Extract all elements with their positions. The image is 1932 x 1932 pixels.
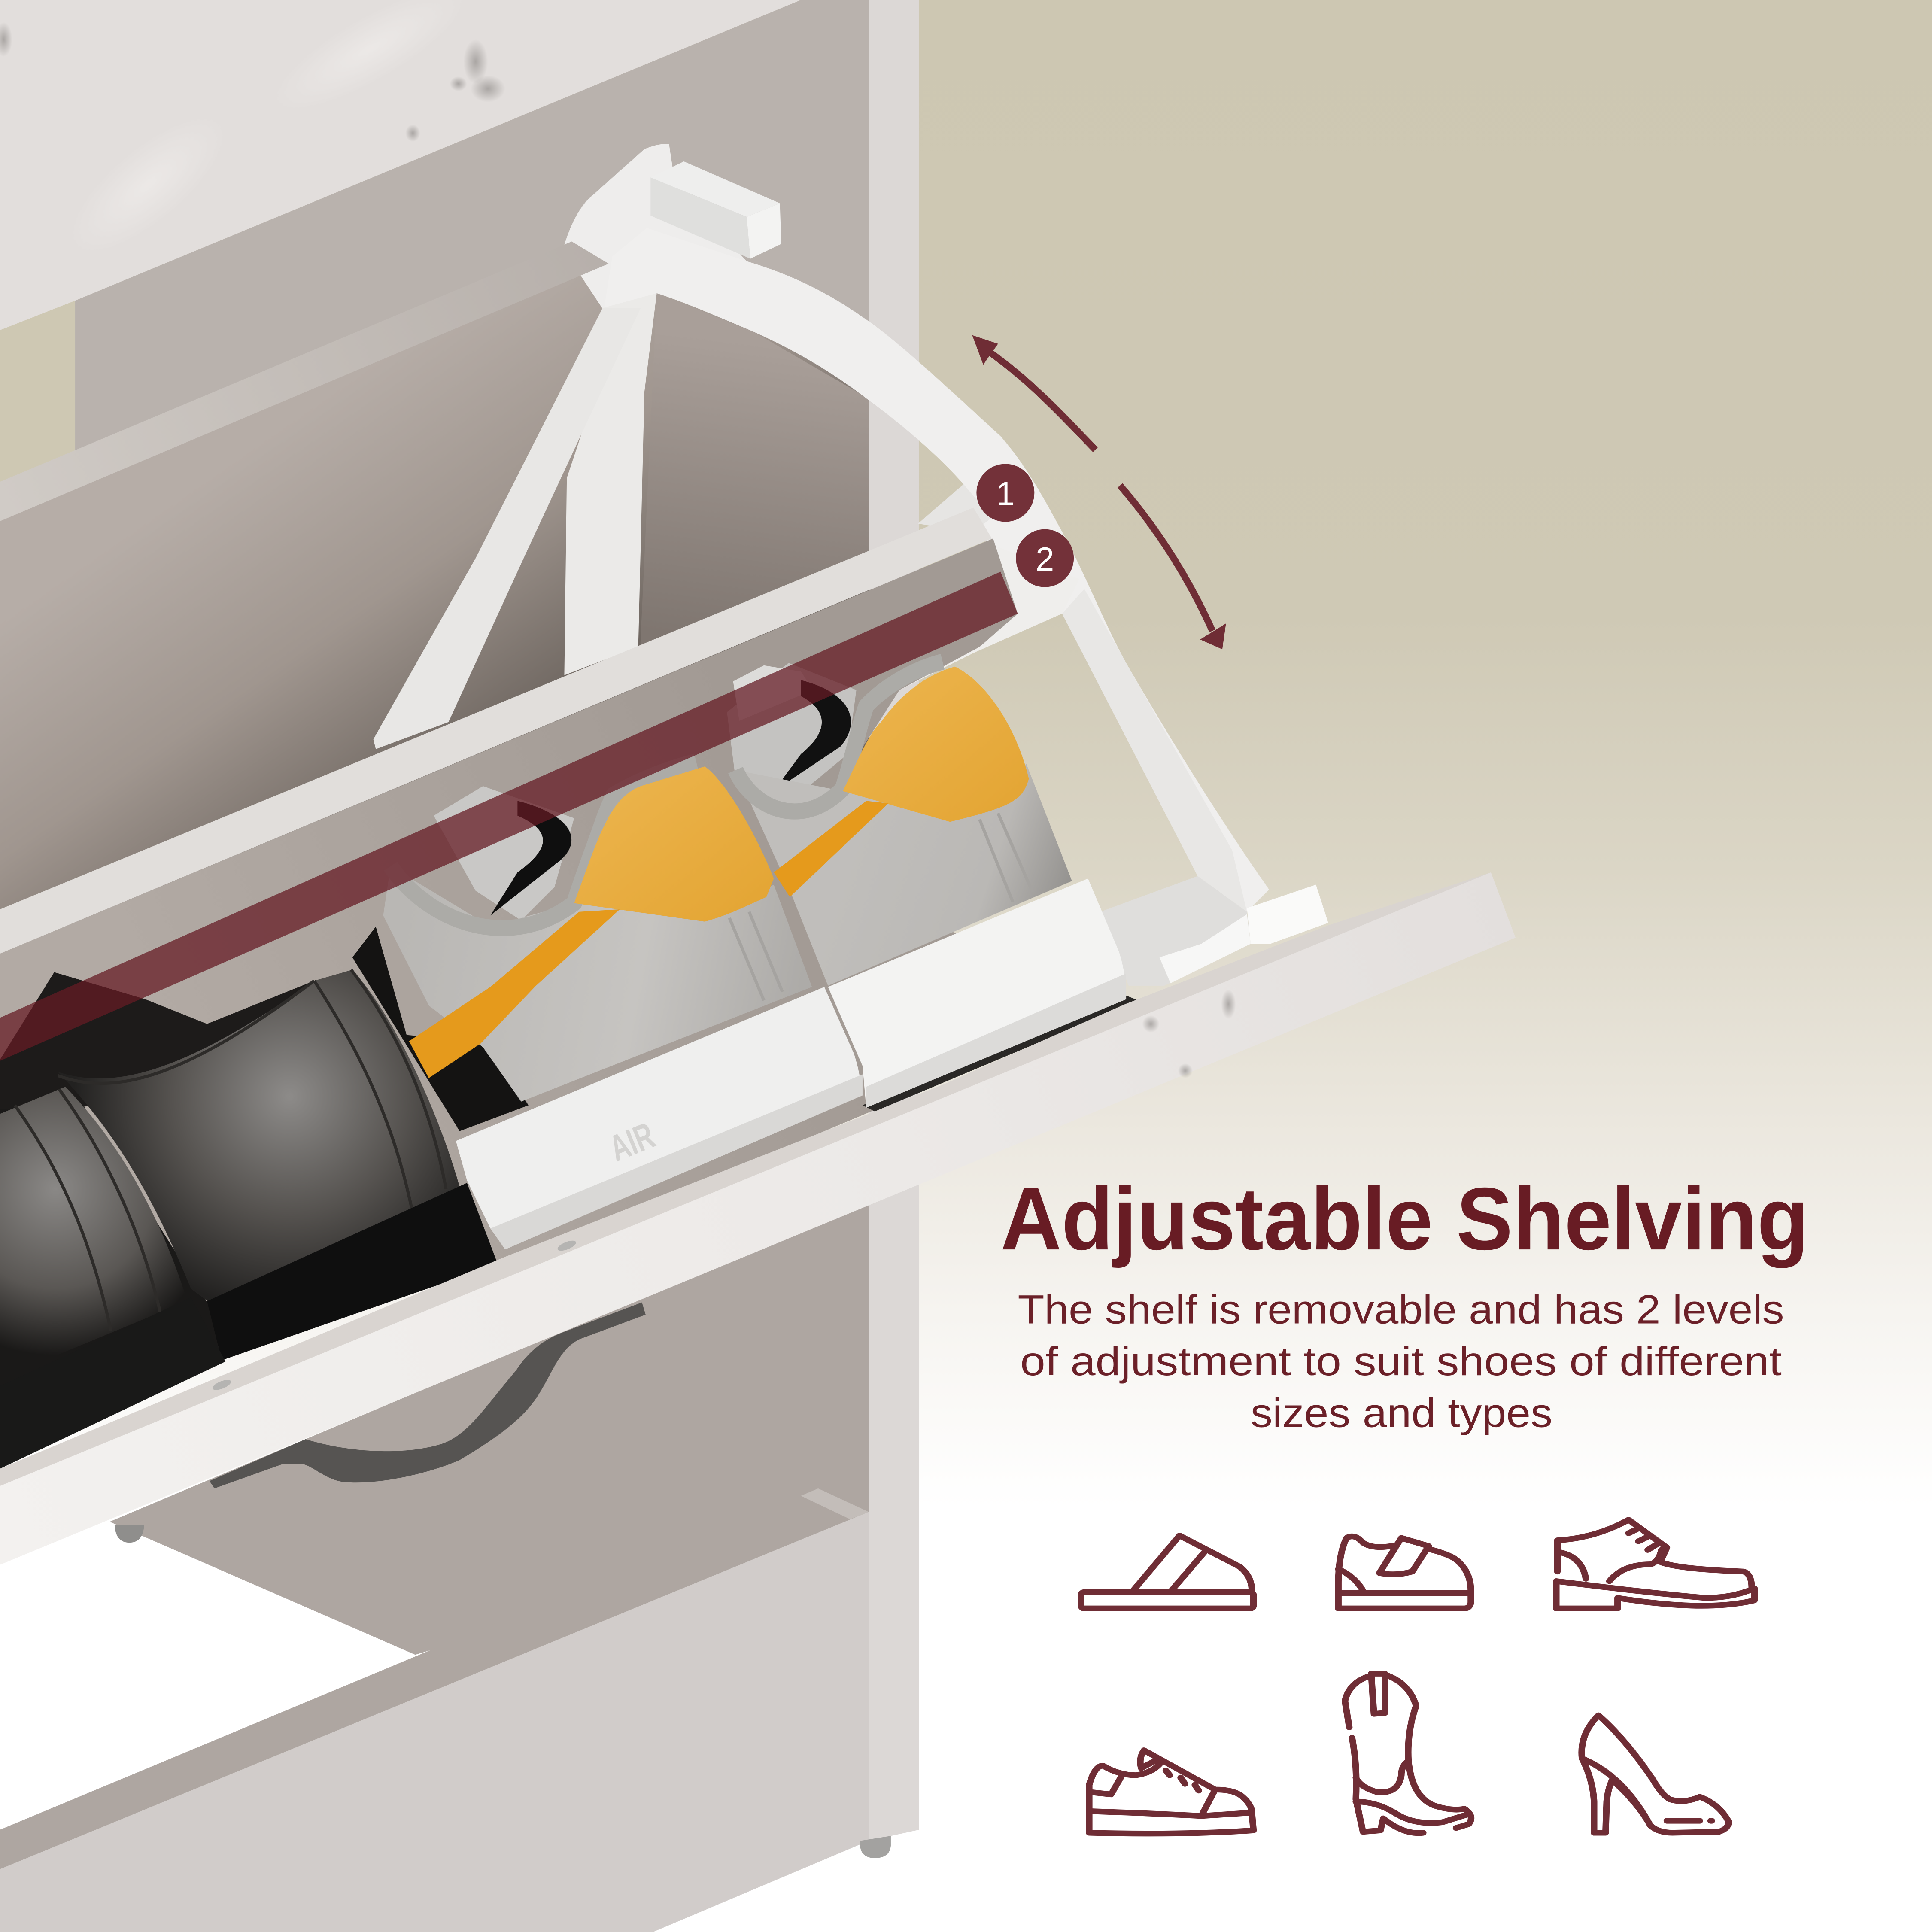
arrow up (972, 335, 1095, 450)
side panel lower (869, 1170, 919, 1841)
inner cavity behind bracket (0, 264, 870, 986)
lower back panel (109, 1201, 870, 1655)
rear sneaker body (735, 764, 1072, 986)
flap screw 1 (556, 1239, 577, 1253)
marble veins (1142, 990, 1236, 1078)
level 2 badge (1016, 529, 1074, 587)
back panel upper (75, 0, 870, 517)
foot clip (1247, 885, 1328, 944)
front leather shoe body (0, 1087, 187, 1379)
front sneaker collar (391, 762, 696, 928)
description: of adjustment to suit shoes of different (1020, 1339, 1782, 1384)
front sneaker interior (434, 786, 574, 920)
rear leather shoe body (58, 970, 459, 1306)
description: sizes and types (1251, 1390, 1552, 1436)
front sneaker (352, 762, 863, 1249)
front sneaker black lining (490, 801, 571, 915)
shoe type icons (1081, 1520, 1755, 1834)
rear sneaker (727, 662, 1126, 1108)
rear sneaker stitching (980, 813, 1033, 902)
front leather shoe stitching (15, 1089, 160, 1331)
upper arm (918, 484, 992, 532)
lower arc inner shade (1062, 589, 1247, 912)
level arrows (972, 335, 1226, 649)
lower arm (899, 542, 1079, 690)
rear leather shoe (0, 970, 498, 1360)
furniture foot right (860, 1836, 891, 1858)
icon: oxford shoe (1556, 1520, 1755, 1608)
bracket (374, 144, 1328, 986)
flap screw 2 (211, 1378, 232, 1392)
front sneaker black panel (352, 927, 529, 1131)
drawer top edge (0, 1488, 869, 1869)
icon: sneaker (1089, 1750, 1254, 1834)
icon: slipper (1081, 1536, 1254, 1608)
upper and lower arc (604, 228, 1269, 912)
rear sneaker tread (866, 973, 1126, 1108)
bracket apex (563, 144, 747, 310)
rear leather shoe stitching (58, 970, 446, 1214)
title: Adjustable Shelving (1000, 1169, 1809, 1268)
drawer front (0, 1512, 869, 1932)
level 1 badge: 1 (996, 476, 1015, 513)
marble top panel (0, 0, 801, 330)
rear sneaker black lining (774, 680, 851, 791)
front sneaker stitching (729, 912, 782, 1000)
arrow down (1120, 486, 1226, 649)
sole shadow (863, 996, 1139, 1112)
rear leather shoe top dark (0, 972, 314, 1109)
mounting block (650, 161, 781, 259)
icon: velcro shoe (1338, 1537, 1471, 1608)
rear leather shoe sole (207, 1183, 498, 1360)
front sneaker body (383, 866, 812, 1102)
level 2 badge: 2 (1036, 541, 1054, 578)
front sneaker swoosh (409, 909, 620, 1078)
gap showing background (0, 301, 75, 483)
drawer edge highlight (801, 1488, 869, 1519)
shoes shadow fill (0, 1091, 222, 1469)
level 1 badge (976, 464, 1034, 522)
furniture foot left (115, 1525, 144, 1543)
rear sneaker heel tab (843, 667, 1029, 822)
cavity of middle flap (0, 538, 1124, 1355)
rear sneaker tongue (733, 665, 813, 721)
front leather shoe (0, 1087, 225, 1469)
icon: high heel (1582, 1715, 1728, 1833)
upper shelf edge (0, 241, 609, 521)
flap top surface (0, 872, 1491, 1488)
icon: cowboy boot (1345, 1674, 1471, 1833)
maroon translucent level band (0, 572, 1018, 1061)
description: The shelf is removable and has 2 levels (1018, 1287, 1784, 1332)
lower flap (0, 872, 1516, 1565)
handle (210, 1302, 646, 1488)
rear sneaker swoosh (774, 801, 888, 897)
front leather shoe sole (0, 1297, 225, 1469)
foot wedge (1160, 914, 1251, 983)
cross bar (1100, 876, 1251, 986)
description (1018, 1287, 1784, 1436)
vertical strut (564, 293, 657, 675)
middle shelf edge (0, 507, 992, 954)
flap front face (0, 872, 1516, 1565)
front sneaker sole band (490, 1075, 863, 1249)
rear sneaker sole (828, 878, 1126, 1108)
front sneaker sole (456, 987, 863, 1249)
rear sneaker interior (727, 663, 857, 813)
diagonal strut (374, 308, 641, 749)
front sneaker heel tab (574, 766, 774, 922)
rear sneaker collar (735, 662, 942, 811)
AIR mark: AIR (604, 1115, 660, 1170)
bracket hole shading (638, 293, 870, 690)
side panel (869, 0, 919, 1232)
cabinet (0, 0, 919, 1932)
